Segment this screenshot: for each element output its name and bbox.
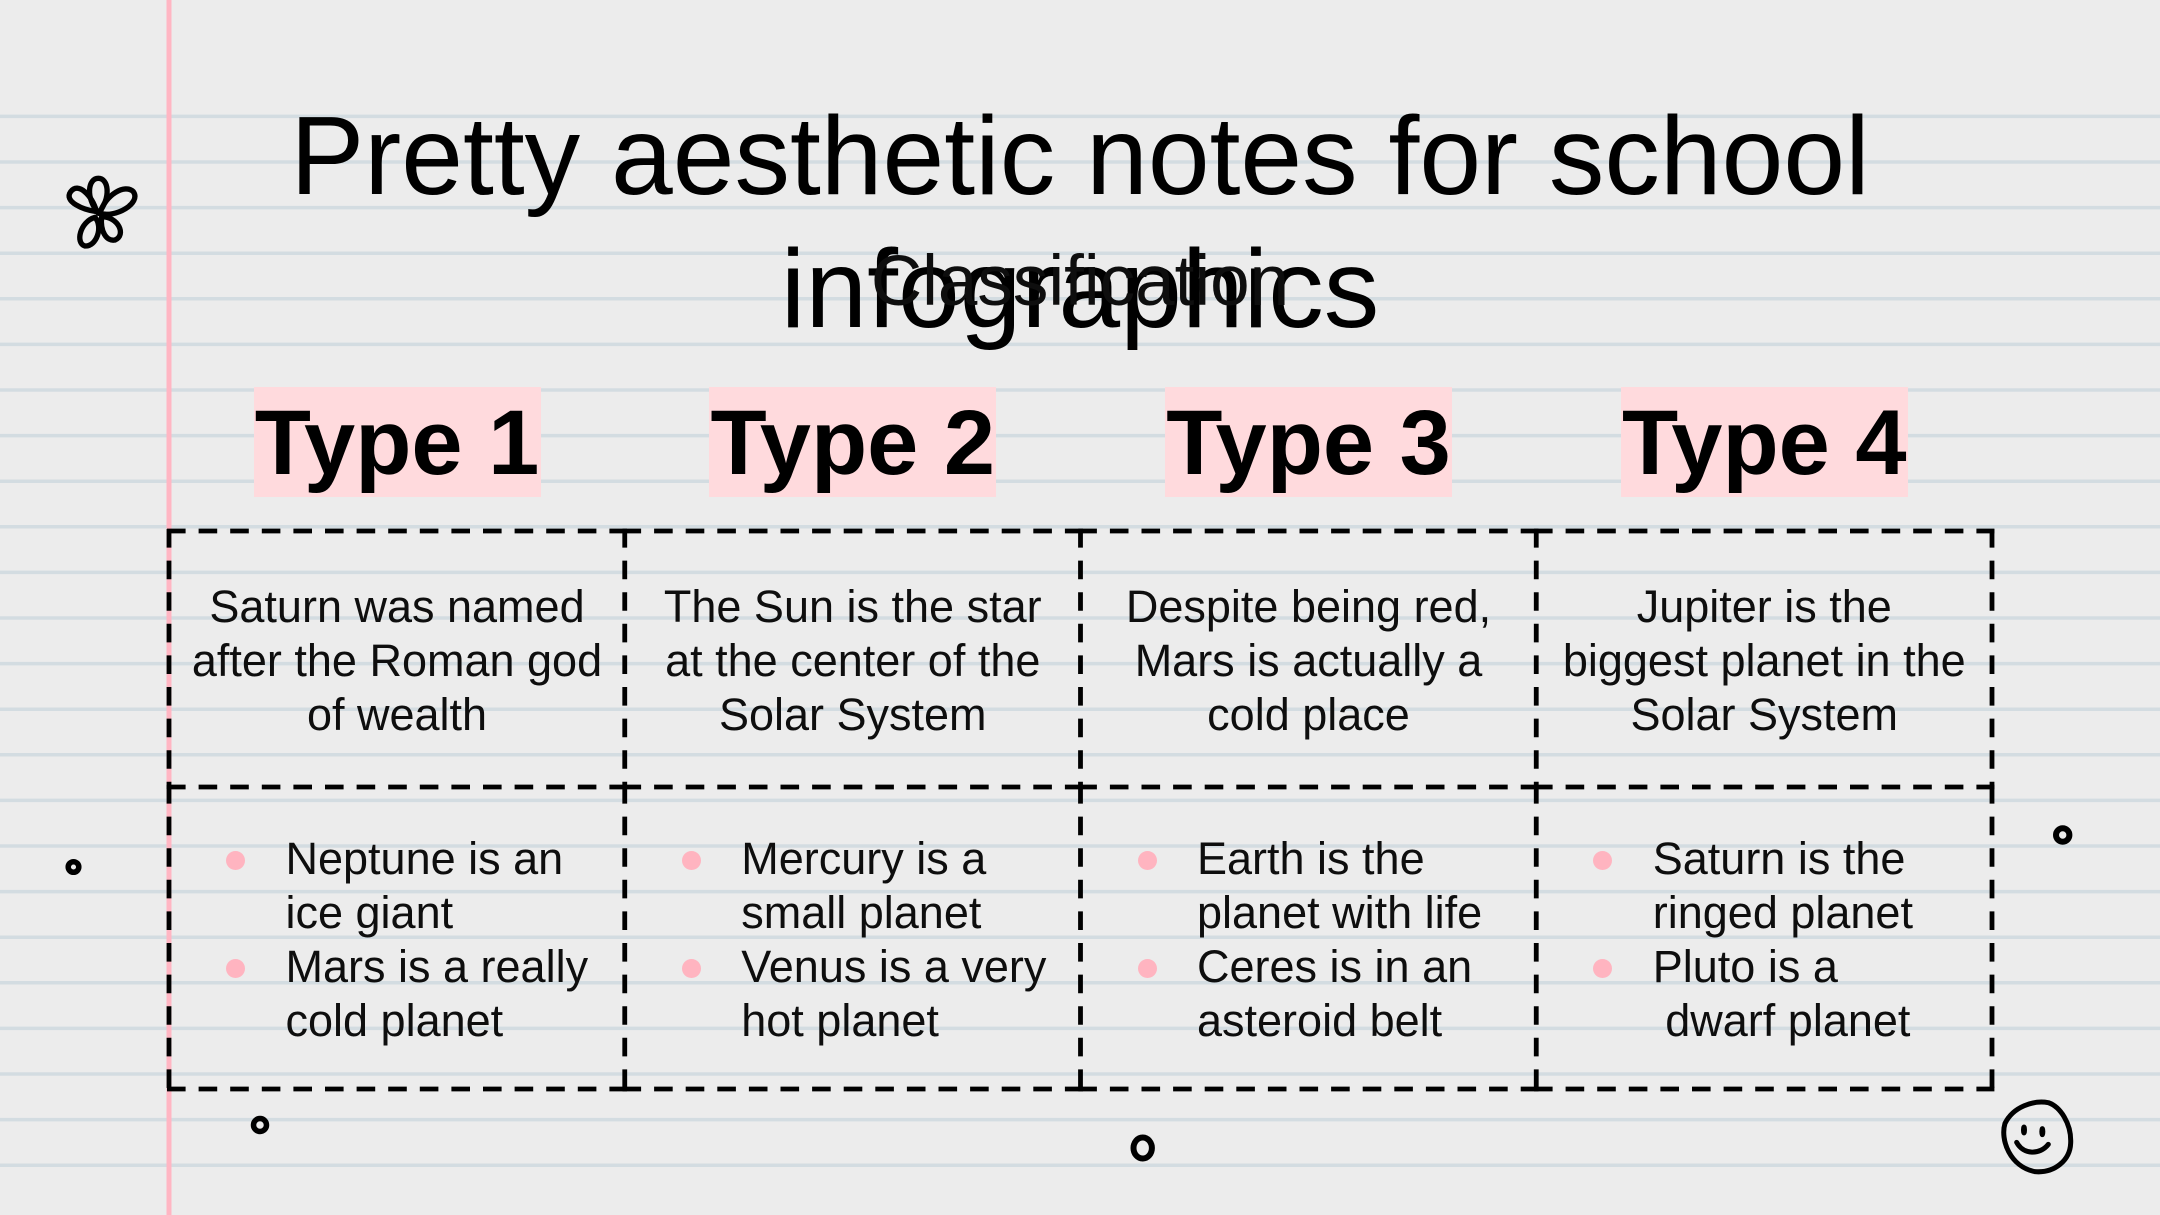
description: Type 1: after the Roman god bbox=[192, 635, 602, 686]
icon: small doodle circle right bbox=[2056, 828, 2069, 842]
icon: small doodle circle left bbox=[68, 862, 79, 872]
bullet list: Type 3: Earth is the planet with life Ceres is in an asteroid belt bbox=[1197, 833, 1482, 1046]
description: Type 2: Solar System bbox=[719, 689, 987, 740]
bullet list: Type 2: Mercury is a small planet Venus is a very hot planet bbox=[741, 833, 1046, 1046]
description: Type 4 bbox=[1563, 581, 1966, 740]
heading: Type 4: Type 4 bbox=[1622, 392, 1907, 494]
description: Type 2: at the center of the bbox=[665, 635, 1040, 686]
description: Type 3: cold place bbox=[1207, 689, 1410, 740]
icon: smiley face bbox=[2004, 1102, 2071, 1172]
description: Type 3: Mars is actually a bbox=[1135, 635, 1482, 686]
description: Type 4: Solar System bbox=[1630, 689, 1898, 740]
description: Type 2 bbox=[664, 581, 1042, 740]
heading: Type 3: Type 3 bbox=[1166, 392, 1451, 494]
description: Type 4: Jupiter is the bbox=[1637, 581, 1892, 632]
title: Pretty aesthetic notes for school bbox=[290, 94, 1870, 218]
icon: small doodle circle bottom left bbox=[254, 1118, 266, 1132]
description: Type 1: Saturn was named bbox=[209, 581, 585, 632]
icon: flower bbox=[69, 178, 135, 246]
bullet list: Type 1: Neptune is an ice giant Mars is a really cold planet bbox=[286, 833, 588, 1046]
icon: small doodle circle bottom center bbox=[1134, 1138, 1152, 1158]
description: Type 3: Despite being red, bbox=[1126, 581, 1491, 632]
description: Type 1 bbox=[192, 581, 602, 740]
heading: Type 2: Type 2 bbox=[710, 392, 995, 494]
title bbox=[290, 94, 1870, 351]
description: Type 4: biggest planet in the bbox=[1563, 635, 1966, 686]
title: infographics bbox=[781, 227, 1379, 351]
bullet list: Type 4: Saturn is the ringed planet Pluto is a dwarf planet bbox=[1653, 833, 1913, 1046]
description: Type 3 bbox=[1126, 581, 1491, 740]
description: Type 1: of wealth bbox=[307, 689, 487, 740]
description: Type 2: The Sun is the star bbox=[664, 581, 1042, 632]
heading: Type 1: Type 1 bbox=[255, 392, 539, 494]
subtitle: Classification bbox=[871, 242, 1289, 321]
